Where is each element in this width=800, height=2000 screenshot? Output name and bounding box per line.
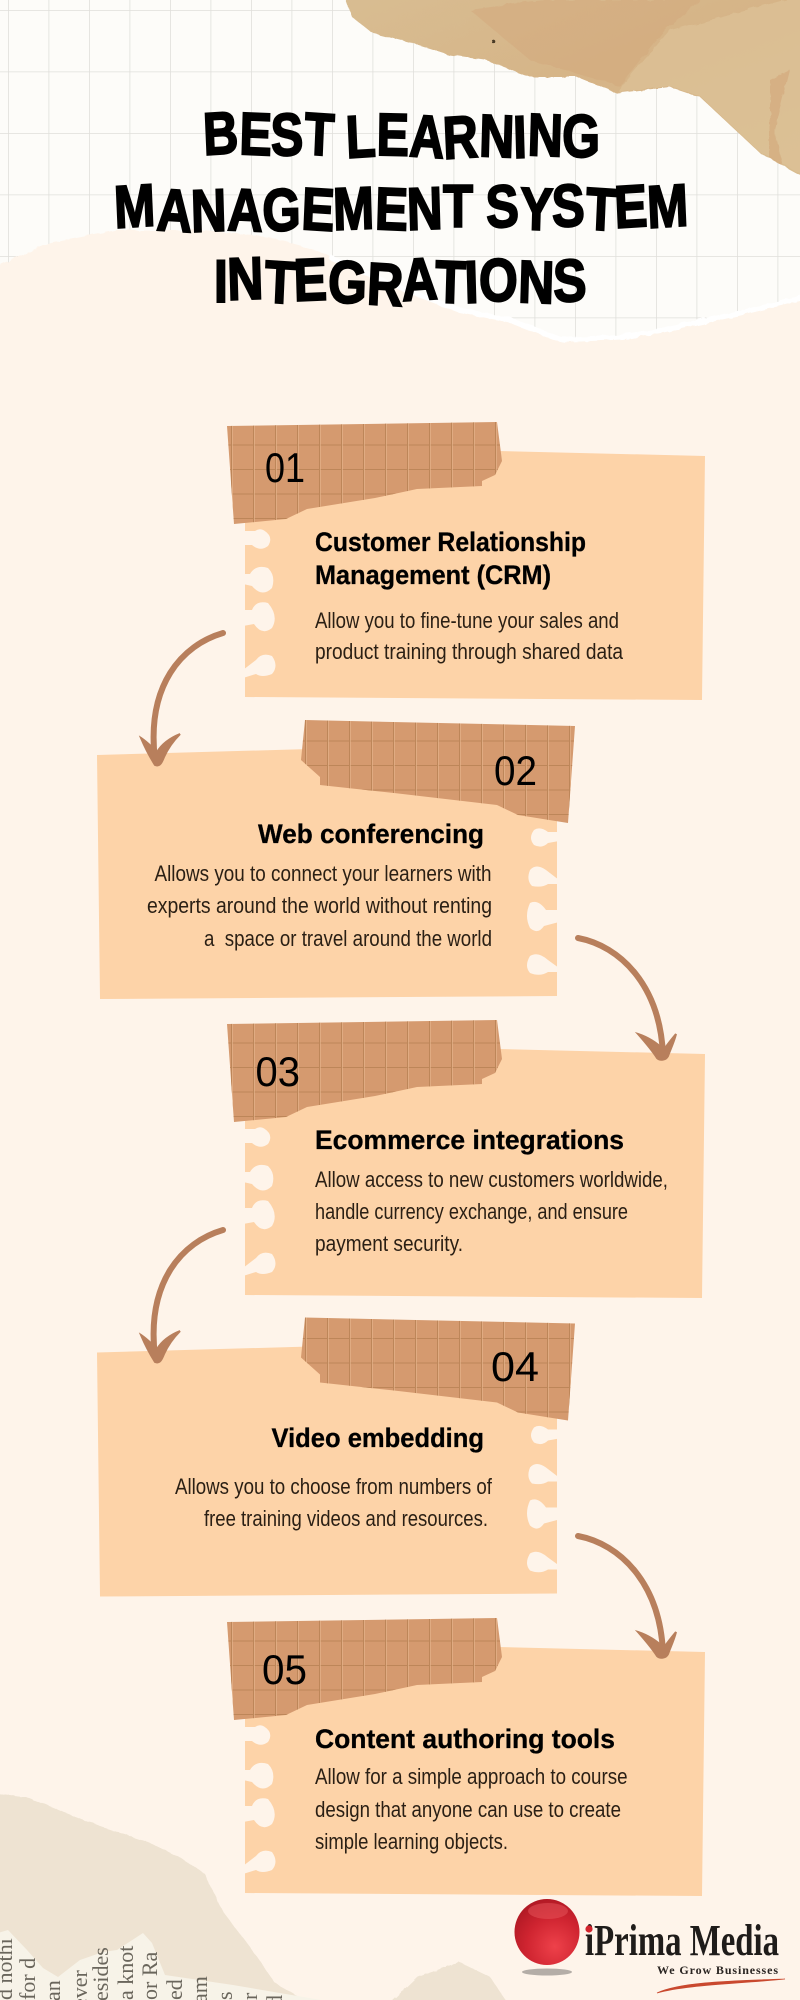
description 5: Allow for a simple approach to course [315, 1764, 628, 1789]
heading: video embedding: Video embedding [272, 1423, 484, 1453]
description 2: a space or travel around the world [204, 926, 492, 951]
heading: ecommerce integrations: Ecommerce integrations [315, 1125, 624, 1155]
title: MANAGEMENT SYSTEM [112, 172, 690, 245]
heading: customer relationship management: Customer Relationship [315, 527, 586, 557]
description 3 [315, 1167, 668, 1256]
logo red dot on i [585, 1925, 593, 1933]
card 2 note paper [97, 730, 559, 999]
number 02: 02 [494, 747, 537, 794]
arrow from step 4 to step 5 [578, 1536, 676, 1658]
number 04: 04 [491, 1343, 539, 1390]
card 3 number tape [227, 1020, 502, 1122]
step 2: web conferencing [97, 720, 575, 999]
logo red sphere [514, 1899, 580, 1976]
description 1: Allow you to fine-tune your sales and [315, 608, 619, 633]
arrow from step 3 to step 4 [141, 1230, 223, 1362]
description 1 [315, 608, 623, 664]
number 01: 01 [265, 444, 305, 491]
newspaper words: r [237, 1992, 262, 2000]
newspaper words: for d [15, 1958, 40, 2000]
newspaper words: s [212, 1991, 237, 2000]
step 1: CRM [227, 422, 705, 700]
description 3: Allow access to new customers worldwide, [315, 1167, 668, 1192]
description 4: free training videos and resources. [204, 1506, 488, 1531]
card 4 note paper [97, 1328, 559, 1596]
description 5 [315, 1764, 628, 1854]
card 1 note paper [243, 440, 705, 700]
torn beige paper bottom left [0, 1793, 510, 2000]
torn newspaper scrap bottom left [0, 1930, 333, 2000]
title [112, 99, 690, 319]
description 3: handle currency exchange, and ensure [315, 1199, 628, 1224]
step 5: content authoring [227, 1618, 705, 1896]
heading: web conferencing: Web conferencing [258, 819, 484, 849]
heading: customer relationship management: Management (CRM) [315, 560, 551, 590]
newspaper words: ed [162, 1979, 187, 2000]
card 5 number tape [227, 1618, 502, 1720]
number 05: 05 [262, 1646, 307, 1693]
card 3 note paper [243, 1038, 705, 1298]
description 1: product training through shared data [315, 639, 623, 664]
description 2: Allows you to connect your learners with [154, 861, 492, 886]
description 5: simple learning objects. [315, 1829, 508, 1854]
card 2 number tape [301, 720, 575, 823]
card 1 number tape [227, 422, 502, 524]
description 5: design that anyone can use to create [315, 1797, 621, 1822]
title: BEST LEARNING [201, 99, 600, 172]
grid paper header background [0, 0, 800, 350]
step 3: ecommerce [227, 1020, 705, 1298]
newspaper words: or Ra [137, 1952, 162, 2000]
newspaper words: a knot [113, 1946, 138, 2000]
arrow from step 2 to step 3 [578, 938, 676, 1060]
card 5 note paper [243, 1636, 705, 1896]
logo tagline: We Grow Businesses [657, 1963, 778, 1977]
logo red swoosh [657, 1979, 785, 1993]
arrow from step 1 to step 2 [141, 633, 223, 765]
description 3: payment security. [315, 1231, 463, 1256]
heading: content authoring tools: Content authoring tools [315, 1724, 615, 1754]
title: INTEGRATIONS [214, 245, 587, 319]
description 2: experts around the world without renting [147, 893, 492, 918]
torn cream paper edge [0, 230, 800, 420]
description 4 [175, 1474, 493, 1531]
newspaper words [0, 1938, 287, 2000]
logo: iPrima Media [514, 1899, 785, 1993]
number 03: 03 [256, 1048, 300, 1095]
step 4: video embedding [97, 1318, 575, 1596]
heading: customer relationship management [315, 527, 586, 590]
card 4 number tape [301, 1318, 575, 1420]
torn brown paper top right [344, 0, 800, 178]
description 4: Allows you to choose from numbers of [175, 1474, 493, 1499]
description 2 [147, 861, 492, 951]
